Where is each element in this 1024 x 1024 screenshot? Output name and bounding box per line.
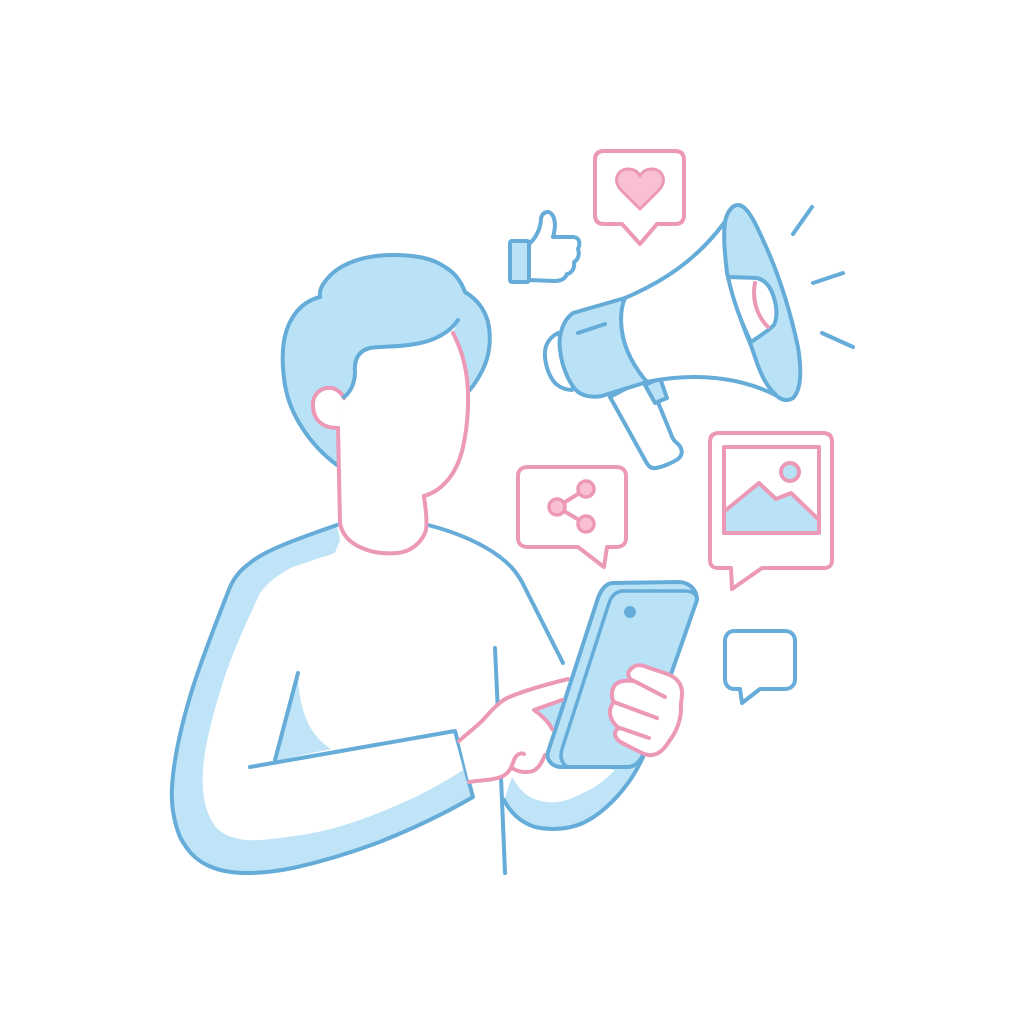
icon: thumbs up <box>510 212 579 282</box>
icon: small speech bubble <box>725 631 795 703</box>
icon: megaphone <box>545 205 800 468</box>
icon: picture card <box>710 433 832 589</box>
hair <box>283 255 490 465</box>
person illustration <box>172 255 643 873</box>
face and neck <box>313 320 468 553</box>
phone <box>548 582 697 767</box>
rear body <box>545 333 580 390</box>
icon: share speech bubble <box>518 467 626 567</box>
handle <box>610 378 682 468</box>
lower sleeve <box>504 757 643 829</box>
right hand fingers <box>610 665 682 755</box>
icon: heart speech bubble <box>595 151 684 244</box>
left hand <box>459 679 572 782</box>
bell opening <box>728 277 777 342</box>
sound lines <box>793 207 853 347</box>
thumb over phone <box>534 700 562 729</box>
torso and arm <box>172 525 643 873</box>
cone <box>625 223 781 398</box>
phone and hand <box>459 582 697 782</box>
bell <box>724 205 800 400</box>
